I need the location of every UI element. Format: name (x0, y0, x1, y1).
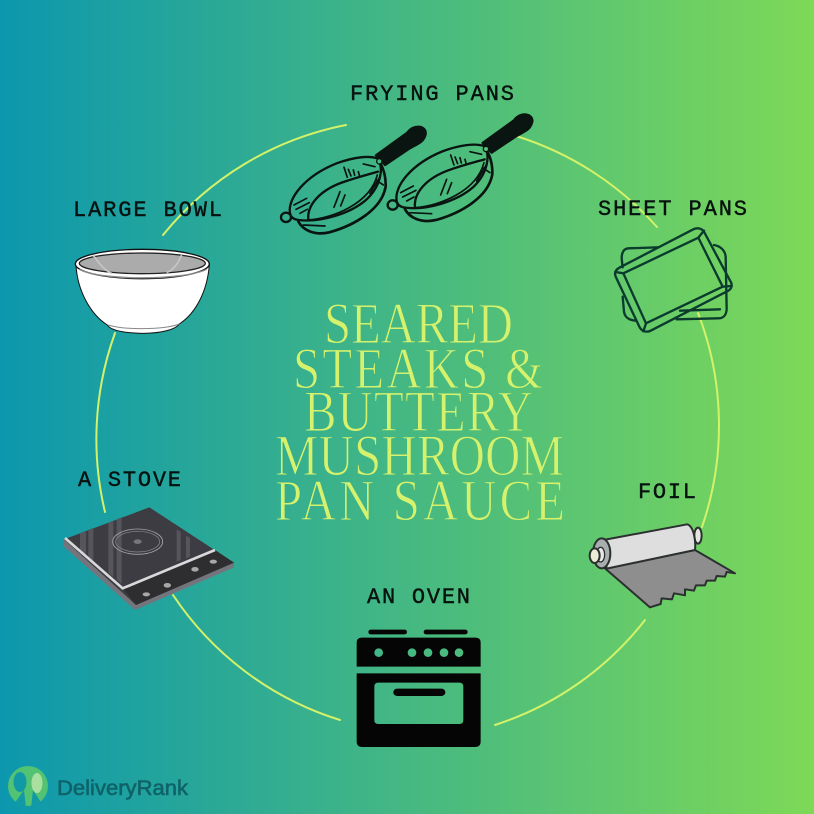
label: foil: FOIL (638, 480, 696, 505)
icon: sheet pans (615, 228, 732, 332)
title: PAN SAUCE (275, 468, 565, 533)
label: large bowl: LARGE BOWL (73, 198, 222, 223)
label: sheet pans: SHEET PANS (598, 197, 747, 222)
icon: oven (357, 630, 481, 747)
icon: foil roll (590, 524, 735, 607)
title (275, 291, 565, 533)
pan two (388, 114, 532, 221)
title: STEAKS & (293, 336, 543, 401)
pan one (281, 127, 426, 233)
ring of arcs connecting tools (96, 125, 719, 725)
icon: induction stove (63, 507, 234, 610)
label: a stove: A STOVE (78, 468, 181, 493)
icon: large bowl (75, 249, 209, 333)
logo wordmark: DeliveryRank (57, 777, 189, 800)
title: MUSHROOM (275, 423, 564, 488)
label: frying pans: FRYING PANS (350, 82, 514, 107)
title: BUTTERY (304, 379, 533, 444)
title: SEARED (324, 291, 513, 356)
label: an oven: AN OVEN (367, 585, 470, 610)
icon: frying pans (281, 114, 532, 233)
logo mark (8, 766, 48, 808)
logo: DeliveryRank (8, 766, 189, 808)
